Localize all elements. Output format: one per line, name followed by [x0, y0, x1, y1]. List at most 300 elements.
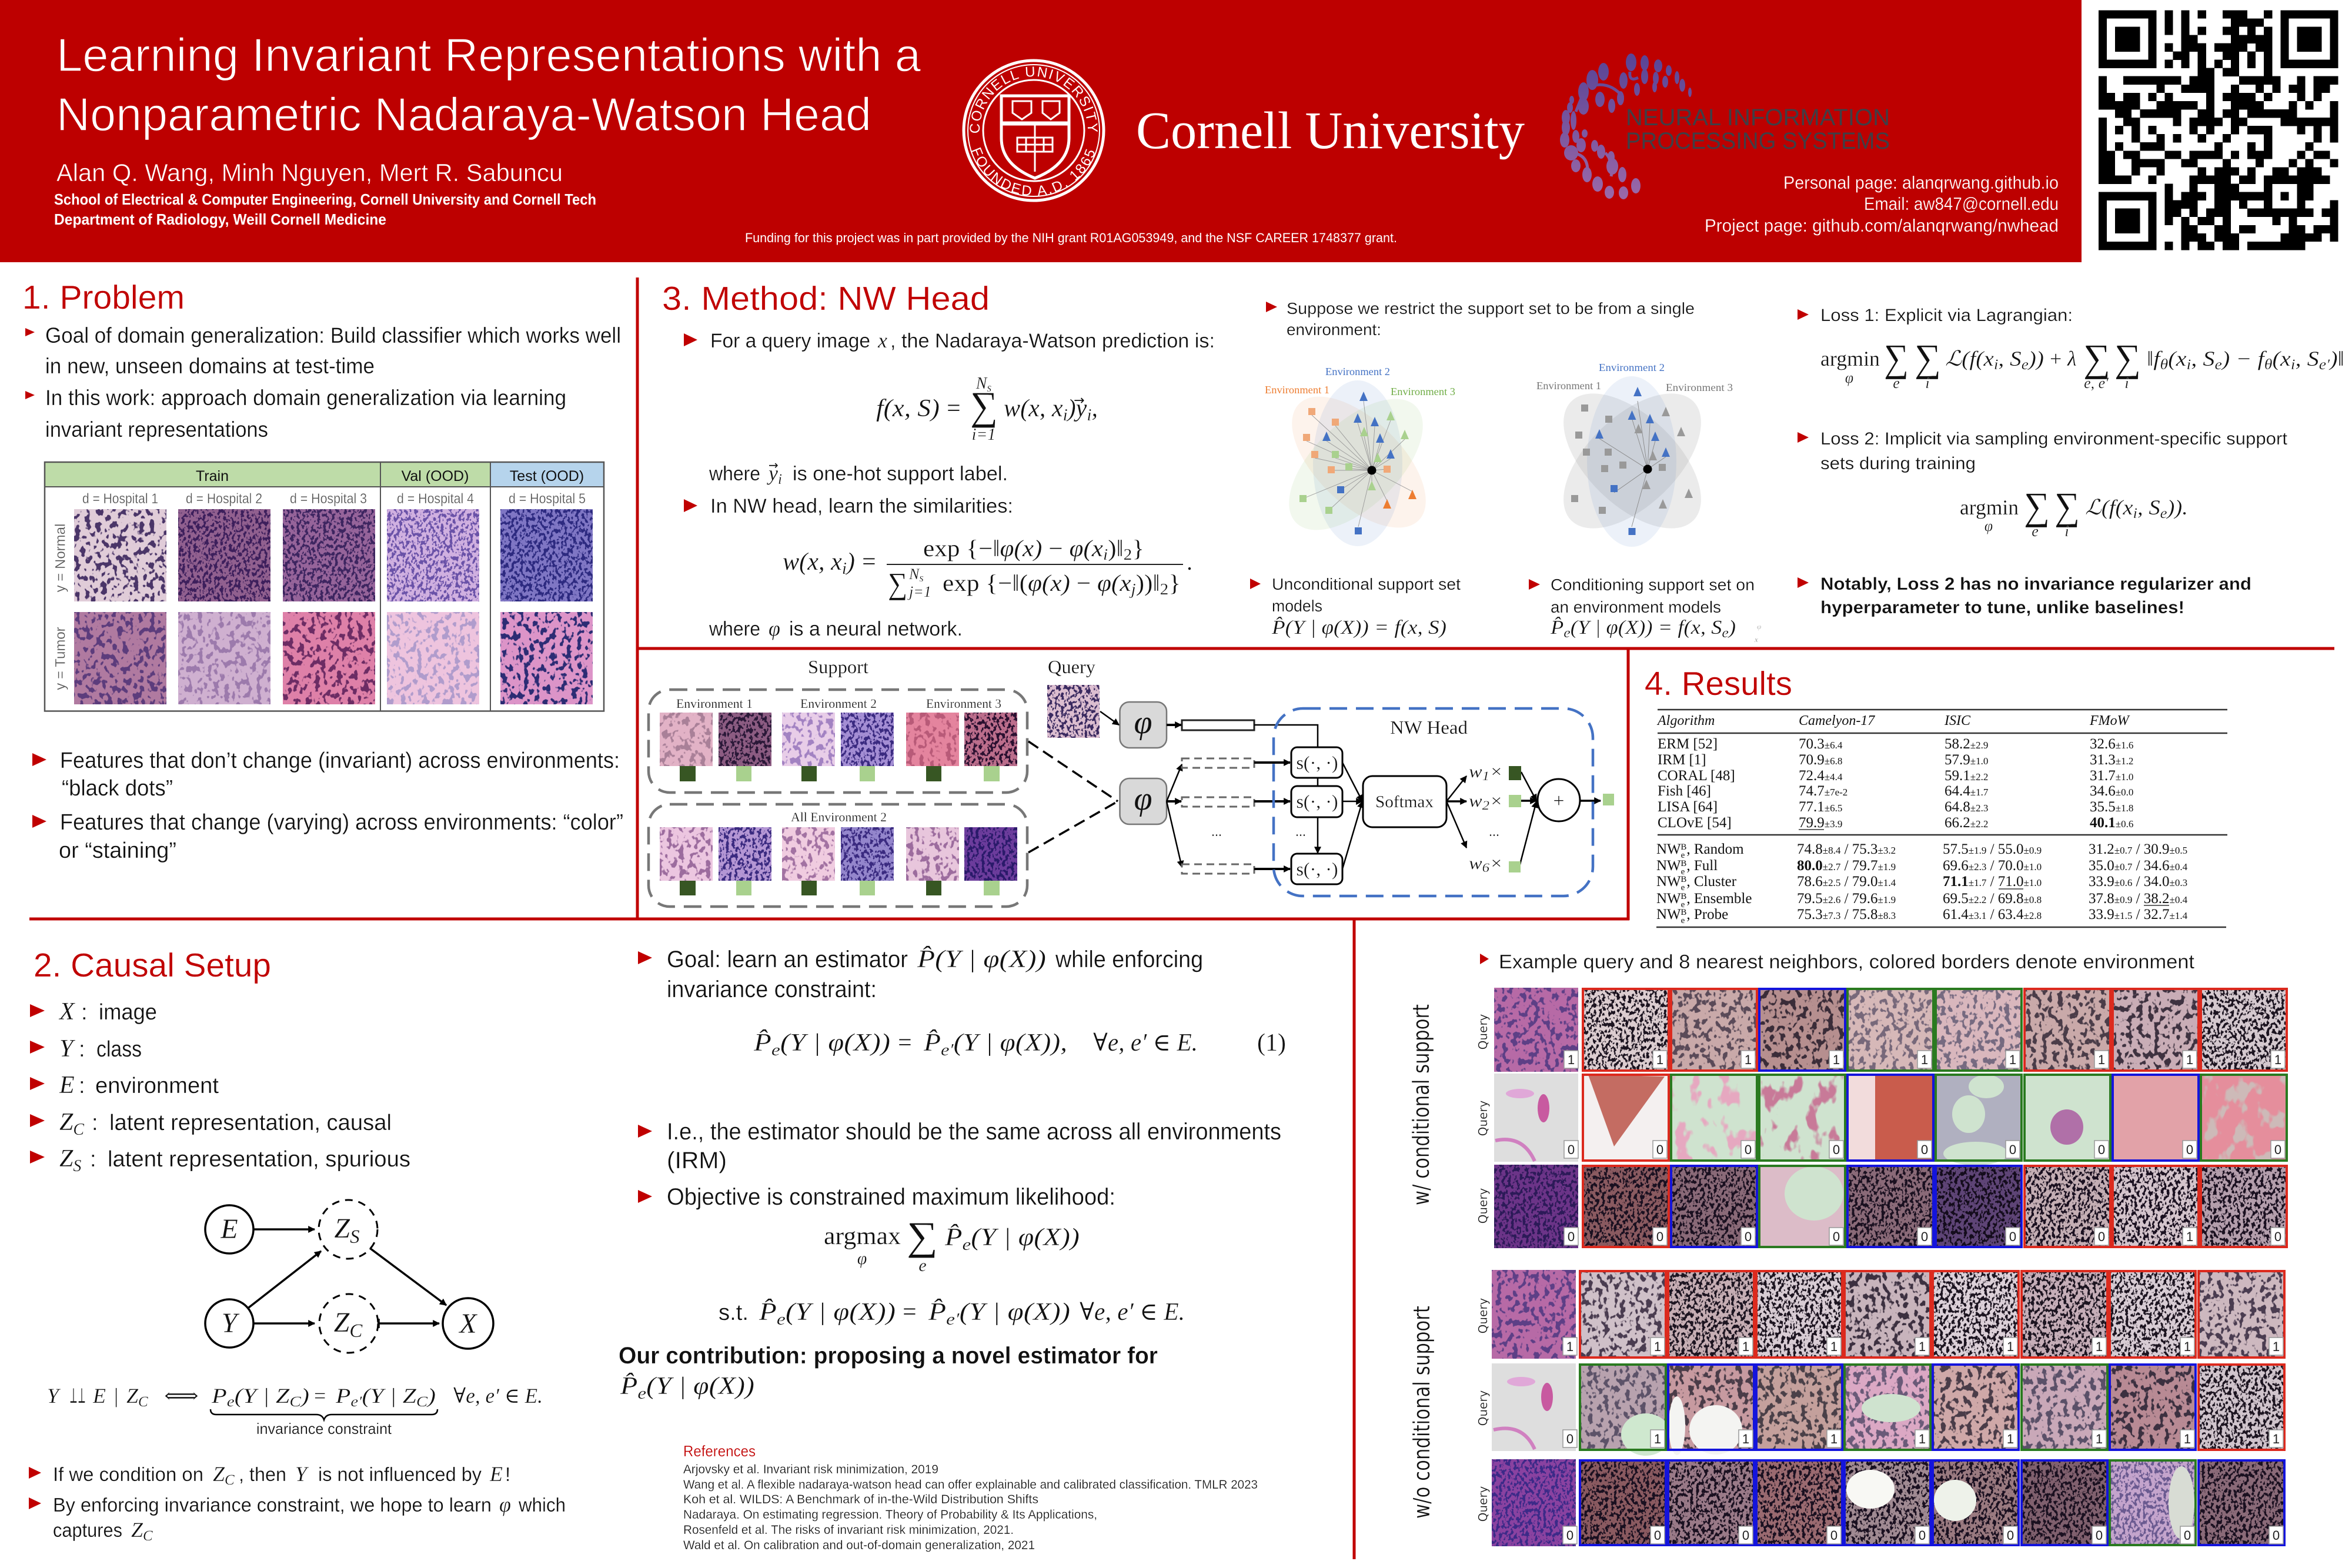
query image [1047, 685, 1100, 738]
weighted labels and output: × [1489, 791, 1503, 811]
results table [1656, 710, 2227, 927]
image row 6: 0 [1742, 1528, 1749, 1543]
argmax objective: φ [857, 1249, 867, 1268]
query row labels: Query [1476, 1014, 1490, 1049]
Loss 2: φ [1984, 517, 1993, 534]
our contribution: Our contribution: proposing a novel estimator for [619, 1343, 1158, 1369]
results table: 70.9±6.8 [1799, 752, 1842, 768]
NW Head dashed container [1274, 708, 1593, 896]
invariance equation: C [416, 1394, 428, 1410]
image row 1: 1 [2009, 1052, 2016, 1067]
icon: Cornell seal: CORNELL UNIVERSITY [970, 66, 1098, 133]
Loss 1: ∑ [2114, 337, 2141, 380]
arrows and feature bars [1028, 711, 1601, 874]
results table: 71.1±1.7 / 71.0±1.0 [1943, 874, 2042, 890]
NW prediction explanation: ) [846, 549, 855, 576]
similarity blocks and softmax: Softmax [1375, 793, 1434, 811]
references [683, 1442, 1258, 1552]
argmax objective: (Y | φ(X)) [786, 1299, 896, 1326]
image row 4: 1 [2096, 1339, 2103, 1354]
support set box: all environment 2 [649, 804, 1027, 907]
argmax objective: ∑ [907, 1213, 938, 1258]
heading: 1. Problem: 1. Problem [22, 279, 185, 316]
bullets: invariant and varying features [32, 748, 623, 863]
Loss 1: i [1994, 357, 1998, 373]
image row 5: 1 [1654, 1432, 1661, 1446]
bullets: conclusions: If we condition on [53, 1463, 203, 1485]
Loss 2: i [2133, 506, 2137, 521]
results table: 64.8±2.3 [1945, 799, 1988, 815]
NW prediction explanation: i [778, 472, 782, 487]
contact links: Personal page: alanqrwang.github.io [1783, 172, 2059, 193]
image row 3: 0 [2274, 1229, 2281, 1244]
image row 1: 1 [1656, 1052, 1663, 1067]
weighted labels and output: 6 [1482, 860, 1489, 875]
references: Arjovsky et al. Invariant risk minimization, 2019 [683, 1463, 938, 1476]
references: Rosenfeld et al. The risks of invariant risk minimization, 2021. [683, 1523, 1014, 1537]
results table: IRM [1] [1658, 752, 1706, 768]
argmax objective: P̂ [759, 1299, 774, 1326]
argmax objective [719, 1213, 1185, 1329]
image row 4: 1 [1566, 1339, 1573, 1354]
equation 1: P̂ [754, 1029, 769, 1057]
results table: B [1681, 875, 1686, 884]
image row 3: 0 [2098, 1229, 2105, 1244]
chart: conditional support set diagram [1536, 362, 1733, 552]
heading: 3. Method: 3. Method: NW Head [662, 280, 990, 317]
variable list: : [92, 1111, 98, 1135]
bullets: goal and approach: in new, unseen domains at test-time [45, 354, 375, 378]
image row 5: 1 [2184, 1432, 2191, 1446]
image row 6: 0 [2273, 1528, 2280, 1543]
image row 1: 1 [2274, 1052, 2281, 1067]
references: Wald et al. On calibration and out-of-domain generalization, 2021 [683, 1539, 1035, 1552]
figure: WILDS hospital data table [45, 462, 604, 711]
results table: , Probe [1686, 907, 1728, 922]
icon: NeurIPS logo: NEURAL INFORMATION [1626, 105, 1890, 131]
results table: 58.2±2.9 [1945, 736, 1988, 752]
bullets: invariant and varying features: Features that don’t change (invariant) across environments: [60, 748, 620, 773]
bullets: goal and approach: Goal of domain generalization: Build classifier which works well [45, 323, 621, 347]
NW prediction explanation: i [1103, 546, 1108, 563]
argmax objective: s.t. [719, 1300, 749, 1325]
chart: conditional support set diagram: Environment 3 [1666, 382, 1733, 393]
bullet: restrict support: environment: [1287, 320, 1381, 339]
NW prediction explanation: For a query image [710, 330, 870, 352]
goal bullet [638, 945, 1203, 1002]
bullets: conclusions [29, 1462, 566, 1544]
bullets: conclusions: , then [239, 1463, 286, 1485]
causal graph [205, 1200, 493, 1353]
results table: e [1681, 900, 1685, 910]
image row 1: 1 [1921, 1052, 1928, 1067]
side label: with conditional support: w/ conditional support [1408, 1004, 1434, 1205]
Loss 2: , S [2137, 496, 2160, 519]
bullets: conclusions: By enforcing invariance constraint, we hope to learn [53, 1494, 492, 1516]
Loss 2: Loss 2: Implicit via sampling environment-specific support [1820, 429, 2288, 449]
figure: WILDS hospital data table: y = Tumor [52, 627, 68, 690]
results table: CORAL [48] [1658, 768, 1735, 784]
support set box: environments 1-3 [649, 690, 1027, 793]
Loss 2: argmin [1960, 496, 2019, 519]
references: Wang et al. A flexible nadaraya-watson head can offer explainable and calibrated classification. TMLR 2023 [683, 1478, 1258, 1492]
our contribution [619, 1343, 1158, 1403]
bullet: conditioning support set: e [1563, 626, 1571, 641]
bullet: conditioning support set: an environment models [1551, 598, 1721, 616]
image row 1: 1 [1568, 1052, 1575, 1067]
NW Head dashed container: NW Head [1390, 717, 1468, 738]
results table: 75.3±7.3 / 75.8±8.3 [1797, 907, 1896, 922]
panel: objective (middle column) [619, 945, 1286, 1552]
image row 3: 0 [1568, 1229, 1575, 1244]
variable list: image [99, 1000, 157, 1025]
NW prediction explanation [684, 329, 1215, 640]
image row 4: 1 [2007, 1339, 2014, 1354]
equation 1: e′ [941, 1041, 954, 1059]
bullets: conclusions: C [143, 1528, 153, 1544]
variable list: Z [59, 1109, 73, 1136]
bullets: conclusions: captures [53, 1519, 122, 1541]
variable list: : [90, 1147, 96, 1172]
Loss 1: θ [2160, 357, 2168, 373]
support and query labels: Query [1048, 656, 1095, 677]
results table: B [1681, 892, 1686, 901]
I.e. and objective bullets [638, 1119, 1281, 1210]
NW prediction explanation: w(x, x [1004, 395, 1063, 422]
bullets: conclusions: Y [295, 1462, 309, 1486]
results table: e [1681, 851, 1685, 860]
panel: 2. Causal Setup [29, 947, 566, 1544]
Loss 1: ∑ [2083, 337, 2110, 380]
Loss 1: , S [2296, 347, 2319, 370]
equation 1 [753, 1029, 1286, 1059]
variable list: X [58, 998, 76, 1025]
chart: unconditional support set diagram: Environment 1 [1265, 384, 1329, 396]
bullets: invariant and varying features: “black dots” [62, 776, 173, 801]
affiliations: School of Electrical & Computer Engineering, Cornell University and Cornell Tech [54, 190, 596, 208]
support set box: environments 1-3: Environment 2 [800, 696, 877, 711]
query row labels: Query [1476, 1188, 1490, 1223]
NW prediction explanation: f(x, S) [876, 395, 940, 422]
Loss 1: ℒ(f(x [1945, 347, 1991, 370]
results table: ERM [52] [1658, 736, 1718, 752]
weighted labels and output: × [1489, 854, 1503, 873]
image row 6: 0 [1919, 1528, 1926, 1543]
image row 1: 1 [1745, 1052, 1752, 1067]
image row 1 [1494, 988, 2288, 1072]
notable takeaway: hyperparameter to tune, unlike baselines! [1820, 598, 2184, 617]
equation 1: e [771, 1041, 780, 1059]
results table: 57.9±1.0 [1945, 752, 1988, 768]
figure: WILDS hospital data table: y = Normal [52, 524, 68, 592]
bullets: invariant and varying features: or “staining” [59, 838, 176, 863]
image row 2: 0 [2009, 1142, 2016, 1157]
header banner [0, 0, 2082, 262]
figure: WILDS hospital data table: d = Hospital 5 [509, 491, 586, 507]
image row 5: 0 [1566, 1432, 1573, 1446]
bullets: conclusions: Z [213, 1462, 225, 1486]
image row 6: 0 [1566, 1528, 1573, 1543]
results table: 31.3±1.2 [2090, 752, 2133, 768]
similarity blocks and softmax [1211, 747, 1499, 884]
image row 2: 0 [1568, 1142, 1575, 1157]
figure: WILDS hospital data table: d = Hospital 1 [82, 491, 158, 507]
notable takeaway: Notably, Loss 2 has no invariance regularizer and [1820, 574, 2251, 594]
figure: WILDS hospital data table: d = Hospital 4 [397, 491, 474, 507]
invariance equation: C [138, 1394, 148, 1410]
argmax objective: ∀e, e′ ∈ E. [1080, 1299, 1185, 1326]
equation 1: (1) [1257, 1029, 1286, 1057]
query row labels: Query [1476, 1100, 1490, 1136]
similarity blocks and softmax: ... [1211, 824, 1222, 840]
results table: 35.5±1.8 [2090, 799, 2133, 815]
NW prediction explanation: φ [769, 617, 780, 640]
results table: 69.5±2.2 / 69.8±0.8 [1943, 891, 2042, 907]
results table: 61.4±3.1 / 63.4±2.8 [1943, 907, 2042, 922]
image row 6: 0 [1830, 1528, 1838, 1543]
Loss 1: Loss 1: Explicit via Lagrangian: [1820, 306, 2073, 325]
image row 5: 1 [2007, 1432, 2014, 1446]
NW prediction explanation: )y [1067, 395, 1087, 422]
NW prediction explanation: i [842, 559, 847, 578]
Loss 1: e [2022, 357, 2029, 373]
NW prediction explanation: } [1168, 570, 1181, 596]
image row 5: 1 [2273, 1432, 2280, 1446]
bullet: conditioning support set: φ [1757, 622, 1761, 631]
invariance equation: ⟺ [164, 1384, 199, 1407]
results table: , Full [1686, 858, 1718, 874]
invariance equation: e′ [350, 1394, 362, 1410]
results table: e [1681, 883, 1685, 892]
results table: e [1681, 867, 1685, 877]
image row 3: 0 [1745, 1229, 1752, 1244]
affiliations: Department of Radiology, Weill Cornell Medicine [54, 210, 386, 228]
Loss 2: ∑ [2024, 485, 2050, 528]
phi encoders: φ [1134, 781, 1152, 817]
invariance equation: ⊥⊥ [69, 1384, 86, 1407]
references: Koh et al. WILDS: A Benchmark of in-the-Wild Distribution Shifts [683, 1493, 1038, 1506]
our contribution: P̂ [620, 1373, 636, 1400]
image row 3: 0 [1656, 1229, 1663, 1244]
bullet: conditioning support set: P̂ [1551, 617, 1563, 638]
bullets: conclusions: which [518, 1494, 566, 1516]
image row 1: 1 [1833, 1052, 1840, 1067]
bullet: unconditional support set models: Unconditional support set [1272, 575, 1461, 593]
image row 6: 0 [2184, 1528, 2191, 1543]
panel: 3. Method: NW Head [662, 280, 2344, 644]
bullet: restrict support [1266, 299, 1695, 339]
icon: NeurIPS logo: PROCESSING SYSTEMS [1626, 128, 1890, 154]
Loss 2: )). [2166, 496, 2188, 519]
argmax objective: e′ [946, 1310, 960, 1329]
image row 1: 1 [2098, 1052, 2105, 1067]
chart: unconditional support set diagram: Environment 2 [1325, 366, 1390, 377]
bullets: conclusions: is not influenced by [318, 1463, 482, 1485]
NW prediction explanation: ∑ [970, 383, 998, 428]
phi encoders [1120, 702, 1167, 824]
goal bullet: Goal: learn an estimator [667, 947, 908, 972]
Loss 1: e′ [2319, 357, 2330, 373]
NW prediction explanation: x [877, 329, 887, 352]
heading: 2. Causal Setup: 2. Causal Setup [34, 947, 271, 984]
equation 1: = [898, 1029, 912, 1057]
NW prediction explanation: 2 [1160, 580, 1168, 598]
results table: NW [1656, 874, 1681, 890]
NW prediction explanation: } [1132, 535, 1144, 561]
results table: Algorithm [1656, 713, 1715, 728]
Loss 1: ∑ [1884, 337, 1909, 380]
variable list: : [81, 1000, 88, 1025]
NW prediction explanation: s [919, 572, 924, 584]
NW prediction explanation: exp {−‖( φ(x) − φ(x [943, 570, 1128, 596]
results table: 79.5±2.6 / 79.6±1.9 [1797, 891, 1896, 907]
Loss 1: (x [2272, 347, 2291, 370]
icon: NeurIPS logo [1560, 54, 1890, 199]
invariance equation: ) [300, 1384, 309, 1407]
NW prediction explanation: i=1 [972, 426, 995, 444]
image row 2: 0 [1921, 1142, 1928, 1157]
Loss 1: λ [2067, 347, 2077, 370]
image row 5: 1 [2096, 1432, 2103, 1446]
image row 2: 0 [2274, 1142, 2281, 1157]
Loss 1: φ [1845, 369, 1853, 386]
Cornell University wordmark: Cornell University [1136, 102, 1525, 160]
image row 3: 0 [2009, 1229, 2016, 1244]
Loss 1: , S [2191, 347, 2214, 370]
NW prediction explanation: 2 [1124, 546, 1132, 563]
Loss 2: ∑ [2054, 485, 2080, 528]
NW prediction explanation: j=1 [907, 583, 931, 600]
invariance equation: ) [426, 1384, 436, 1407]
image row 1: 1 [2186, 1052, 2193, 1067]
query row labels: Query [1476, 1298, 1490, 1333]
invariance equation: | [114, 1384, 118, 1407]
results table: 66.2±2.2 [1945, 815, 1988, 831]
bullets: conclusions: ! [505, 1463, 510, 1485]
invariance equation: Z [126, 1384, 138, 1407]
invariance equation: invariance constraint [256, 1420, 392, 1437]
bullet: conditioning support set [1529, 576, 1761, 644]
bullets: invariant and varying features: Features that change (varying) across environments: “color” [60, 810, 623, 835]
image row 4: 1 [1830, 1339, 1838, 1354]
results table: e [1681, 916, 1685, 925]
causal graph: Z [334, 1307, 349, 1338]
results table: , Ensemble [1686, 891, 1752, 907]
references: Nadaraya. On estimating regression. Theory of Probability & Its Applications, [683, 1508, 1097, 1522]
chart: unconditional support set diagram: Environment 3 [1391, 386, 1455, 397]
invariance equation: = [314, 1384, 326, 1407]
image row 2 [1494, 1074, 2288, 1165]
funding note: Funding for this project was in part provided by the NIH grant R01AG053949, and the NSF CAREER 1748377 grant. [745, 230, 1397, 245]
argmax objective: e [777, 1310, 786, 1329]
Loss 2: i [2064, 523, 2069, 540]
NW prediction explanation: )) [1136, 570, 1152, 596]
results table: NW [1656, 841, 1681, 857]
image row 4: 1 [1742, 1339, 1749, 1354]
support set box: all environment 2: All Environment 2 [791, 810, 887, 824]
argmax objective: = [903, 1299, 917, 1326]
results table: CLOvE [54] [1658, 815, 1732, 831]
query row labels: Query [1476, 1390, 1490, 1426]
Loss 1: )) [2027, 347, 2044, 370]
similarity blocks and softmax: s(·, ·) [1296, 858, 1338, 880]
NW prediction explanation: In NW head, learn the similarities: [710, 495, 1013, 517]
poster title: Nonparametric Nadaraya-Watson Head [56, 88, 871, 141]
results table: 70.3±6.4 [1799, 736, 1843, 752]
bullet: unconditional support set models: P̂(Y | φ(X)) = f(x, S) [1271, 616, 1446, 638]
image row 5: 1 [1919, 1432, 1926, 1446]
Loss 1: ) − f [2221, 347, 2267, 370]
equation 1: P̂ [924, 1029, 939, 1057]
bullets: conclusions: E [489, 1462, 503, 1486]
results table: 80.0±2.7 / 79.7±1.9 [1797, 858, 1896, 874]
invariance equation: E [92, 1384, 106, 1407]
query row labels [1476, 1014, 1490, 1522]
contact links: Project page: github.com/alanqrwang/nwhead [1705, 215, 2059, 236]
query row labels: Query [1476, 1486, 1490, 1522]
variable list: S [73, 1157, 81, 1175]
weighted labels and output: × [1489, 762, 1503, 781]
results table: Fish [46] [1658, 783, 1711, 799]
image row 6: 0 [2007, 1528, 2014, 1543]
causal graph: C [349, 1320, 363, 1342]
results table: 31.2±0.7 / 30.9±0.5 [2089, 841, 2187, 857]
bullet: conditioning support set: x [1754, 635, 1758, 644]
Loss 2: ℒ(f(x [2085, 496, 2131, 519]
variable list: latent representation, spurious [108, 1147, 410, 1172]
variable list: class [96, 1037, 142, 1062]
panel: NW head architecture diagram [649, 656, 1614, 907]
results table: 33.9±0.6 / 34.0±0.3 [2089, 874, 2187, 890]
invariance equation: (Y | Z [235, 1384, 290, 1407]
our contribution: (Y | φ(X)) [646, 1373, 754, 1400]
Loss 2: sets during training [1820, 454, 1976, 473]
panel: nearest neighbor examples [1408, 951, 2288, 1546]
figure: WILDS hospital data table: d = Hospital 2 [186, 491, 262, 507]
bullet: conditioning support set: (Y | φ(X)) = f(x, S [1571, 617, 1722, 638]
variable list: E [59, 1072, 75, 1099]
icon: Cornell seal: FOUNDED A.D. 1865 [971, 147, 1095, 196]
results table: 78.6±2.5 / 79.0±1.4 [1797, 874, 1896, 890]
support set box: environments 1-3: Environment 3 [926, 696, 1001, 711]
Loss 1: i [1925, 375, 1930, 392]
bullet: restrict support: Suppose we restrict the support set to be from a single [1287, 299, 1695, 317]
bullets: goal and approach: In this work: approach domain generalization via learning [45, 386, 566, 410]
image row 2: 0 [1833, 1142, 1840, 1157]
causal graph: Z [334, 1213, 350, 1244]
NW prediction explanation: . [1187, 549, 1192, 575]
results table: 59.1±2.2 [1945, 768, 1988, 784]
weighted labels and output: 1 [1482, 768, 1489, 783]
references: References [683, 1442, 756, 1460]
Loss 1: e, e′ [2084, 375, 2109, 392]
NW prediction explanation: y [769, 462, 778, 485]
NW prediction explanation: , the Nadaraya-Watson prediction is: [890, 330, 1215, 352]
image row 4: 1 [1919, 1339, 1926, 1354]
causal graph: E [220, 1213, 238, 1245]
variable list: Z [59, 1145, 73, 1172]
image row 5 [1492, 1363, 2286, 1456]
I.e. and objective bullets: I.e., the estimator should be the same across all environments [667, 1119, 1281, 1145]
NW prediction explanation: ‖ [1152, 570, 1160, 596]
support set box: environments 1-3: Environment 1 [676, 696, 753, 711]
image row 2: 0 [1745, 1142, 1752, 1157]
image row 2: 0 [2098, 1142, 2105, 1157]
results table: NW [1656, 858, 1681, 874]
results table: 34.6±0.0 [2090, 783, 2133, 799]
results table: Camelyon-17 [1799, 713, 1875, 728]
image row 4 [1492, 1270, 2286, 1359]
